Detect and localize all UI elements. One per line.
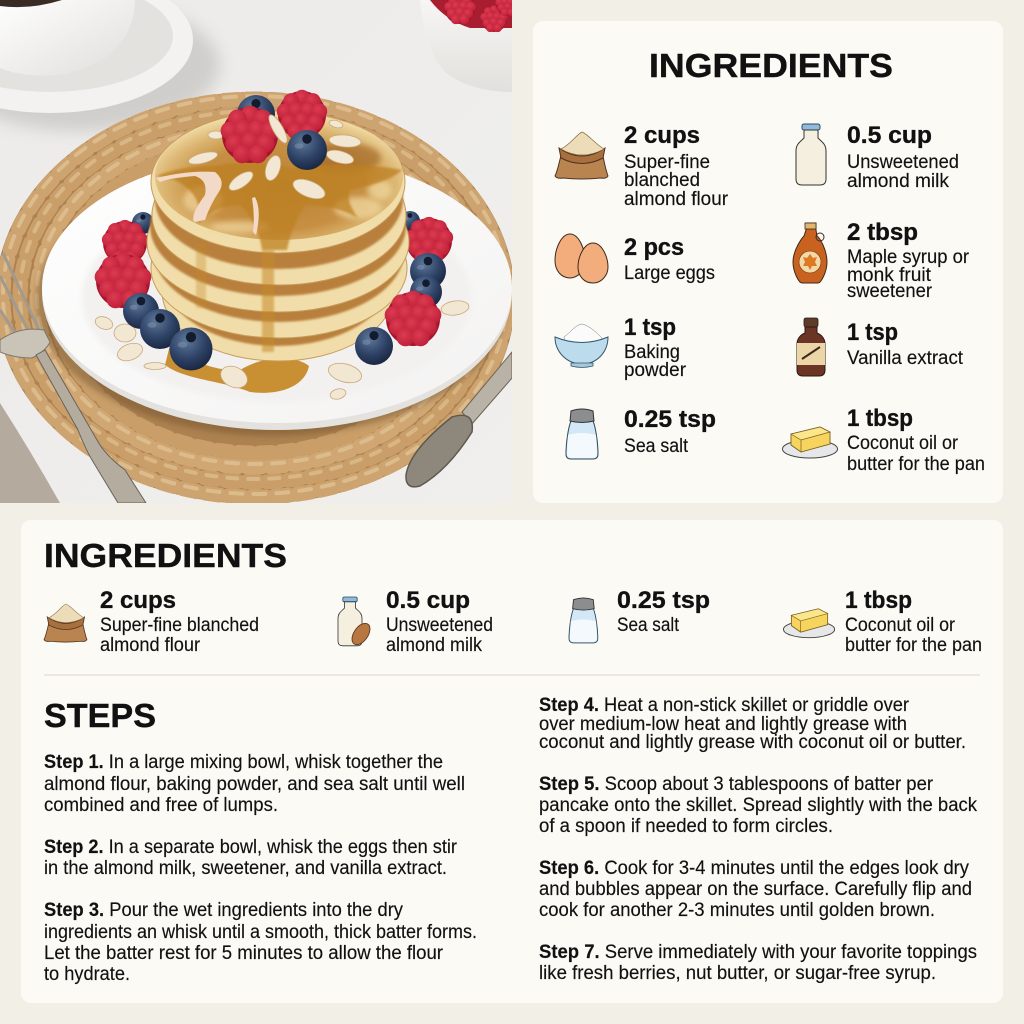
ingredient: eggs: Large eggs bbox=[624, 263, 715, 284]
summary: sea salt: 0.25 tsp bbox=[617, 587, 710, 614]
summary: almond flour: Super-fine blanched bbox=[100, 615, 259, 636]
summary: almond flour: 2 cups bbox=[100, 587, 176, 614]
step 5 bbox=[539, 774, 977, 837]
ingredient: eggs: 2 pcs bbox=[624, 234, 684, 261]
ingredient: almond flour: Super-fine bbox=[624, 152, 710, 173]
step 2 bbox=[44, 837, 458, 879]
step 4: over medium-low heat and lightly grease with bbox=[539, 714, 907, 735]
spoon bbox=[406, 352, 512, 487]
summary: almond milk: 0.5 cup bbox=[386, 587, 470, 614]
syrup pool bbox=[165, 345, 309, 393]
ingredient: baking powder: 1 tsp bbox=[624, 314, 676, 341]
step 7: Step 7. Serve immediately with your favorite toppings bbox=[539, 942, 977, 963]
heading: steps: STEPS bbox=[44, 697, 156, 734]
summary: butter bbox=[783, 587, 982, 656]
step 7 bbox=[539, 942, 977, 984]
ingredient: almond milk: Unsweetened bbox=[847, 152, 959, 173]
heading: ingredients: INGREDIENTS bbox=[649, 47, 893, 84]
step 2: in the almond milk, sweetener, and vanilla extract. bbox=[44, 858, 447, 879]
ingredient: maple syrup: Maple syrup or bbox=[847, 247, 970, 268]
heading: ingredients: INGREDIENTS bbox=[44, 537, 287, 574]
ingredient: vanilla: Vanilla extract bbox=[847, 348, 964, 369]
summary: butter: 1 tbsp bbox=[845, 587, 912, 614]
ingredient: sea salt: Sea salt bbox=[624, 436, 689, 457]
step 6: cook for another 2-3 minutes until golden brown. bbox=[539, 900, 935, 921]
ingredient: almond milk: almond milk bbox=[847, 171, 949, 192]
step 5: Step 5. Scoop about 3 tablespoons of batter per bbox=[539, 774, 934, 795]
summary: sea salt bbox=[569, 587, 710, 643]
ingredient: baking powder: Baking bbox=[624, 342, 680, 363]
ingredient: sea salt bbox=[566, 406, 716, 459]
ingredient: maple syrup: sweetener bbox=[847, 281, 933, 302]
step 1: Step 1. In a large mixing bowl, whisk together the bbox=[44, 752, 443, 773]
ingredient: maple syrup: monk fruit bbox=[847, 265, 932, 286]
fork bbox=[0, 253, 146, 503]
step 5: of a spoon if needed to form circles. bbox=[539, 816, 833, 837]
ingredient: sea salt: 0.25 tsp bbox=[624, 406, 716, 433]
step 5: pancake onto the skillet. Spread slightly with the back bbox=[539, 795, 977, 816]
summary: butter: Coconut oil or bbox=[845, 615, 956, 636]
ingredient: almond flour bbox=[555, 122, 729, 210]
step 3: Step 3. Pour the wet ingredients into the dry bbox=[44, 900, 403, 921]
ingredient: coconut oil or butter bbox=[782, 405, 985, 475]
photo: stack of almond flour pancakes bbox=[0, 0, 521, 504]
step 2: Step 2. In a separate bowl, whisk the eggs then stir bbox=[44, 837, 458, 858]
ingredient: almond flour: blanched bbox=[624, 170, 700, 191]
step 4: Step 4. Heat a non-stick skillet or griddle over bbox=[539, 695, 910, 716]
ingredient: baking powder: powder bbox=[624, 360, 687, 381]
step 3: ingredients an whisk until a smooth, thick batter forms. bbox=[44, 922, 477, 943]
step 1: almond flour, baking powder, and sea salt until well bbox=[44, 774, 465, 795]
summary: almond flour: almond flour bbox=[100, 635, 201, 656]
step 6 bbox=[539, 858, 972, 921]
ingredient: almond milk: 0.5 cup bbox=[847, 122, 932, 149]
ingredient: maple syrup: 2 tbsp bbox=[847, 219, 918, 246]
ingredient: eggs bbox=[555, 234, 715, 284]
syrup drizzle bbox=[156, 162, 402, 250]
summary: sea salt: Sea salt bbox=[617, 615, 680, 636]
step 1: combined and free of lumps. bbox=[44, 795, 278, 816]
ingredient: vanilla: 1 tsp bbox=[847, 319, 898, 346]
panel: ingredients summary and steps bbox=[21, 520, 1003, 1003]
step 3 bbox=[44, 900, 477, 985]
pancake stack bbox=[147, 111, 409, 361]
coconut drizzle bbox=[156, 172, 222, 222]
step 4 bbox=[539, 695, 966, 753]
summary: almond milk bbox=[338, 587, 493, 656]
panel: ingredients card bbox=[533, 21, 1003, 503]
summary: almond milk: Unsweetened bbox=[386, 615, 493, 636]
white plate bbox=[36, 153, 512, 436]
summary: butter: butter for the pan bbox=[845, 635, 982, 656]
step 3: to hydrate. bbox=[44, 964, 130, 985]
ingredient: almond flour: almond flour bbox=[624, 189, 729, 210]
ingredient: coconut oil or butter: Coconut oil or bbox=[847, 433, 959, 454]
step 3: Let the batter rest for 5 minutes to allow the flour bbox=[44, 943, 444, 964]
ingredient: coconut oil or butter: butter for the pan bbox=[847, 454, 985, 475]
step 7: like fresh berries, nut butter, or sugar-free syrup. bbox=[539, 963, 936, 984]
woven placemat bbox=[0, 92, 515, 504]
napkin bbox=[0, 403, 60, 503]
side berries behind stack bbox=[95, 211, 453, 308]
ingredient: almond milk bbox=[796, 122, 959, 192]
summary: almond milk: almond milk bbox=[386, 635, 482, 656]
summary: almond flour bbox=[44, 587, 259, 656]
sliced almonds bbox=[93, 119, 470, 401]
front berries bbox=[123, 90, 441, 371]
ingredient: coconut oil or butter: 1 tbsp bbox=[847, 405, 913, 432]
step 1 bbox=[44, 752, 465, 816]
step 4: coconut and lightly grease with coconut oil or butter. bbox=[539, 732, 966, 753]
saucer and coffee cup bbox=[0, 0, 220, 131]
ingredient: maple syrup bbox=[793, 219, 970, 302]
ingredient: vanilla bbox=[797, 318, 964, 376]
ingredient: baking powder bbox=[555, 314, 687, 381]
step 6: Step 6. Cook for 3-4 minutes until the edges look dry bbox=[539, 858, 969, 879]
bowl of raspberries bbox=[420, 0, 521, 92]
ingredient: almond flour: 2 cups bbox=[624, 122, 700, 149]
step 6: and bubbles appear on the surface. Carefully flip and bbox=[539, 879, 972, 900]
